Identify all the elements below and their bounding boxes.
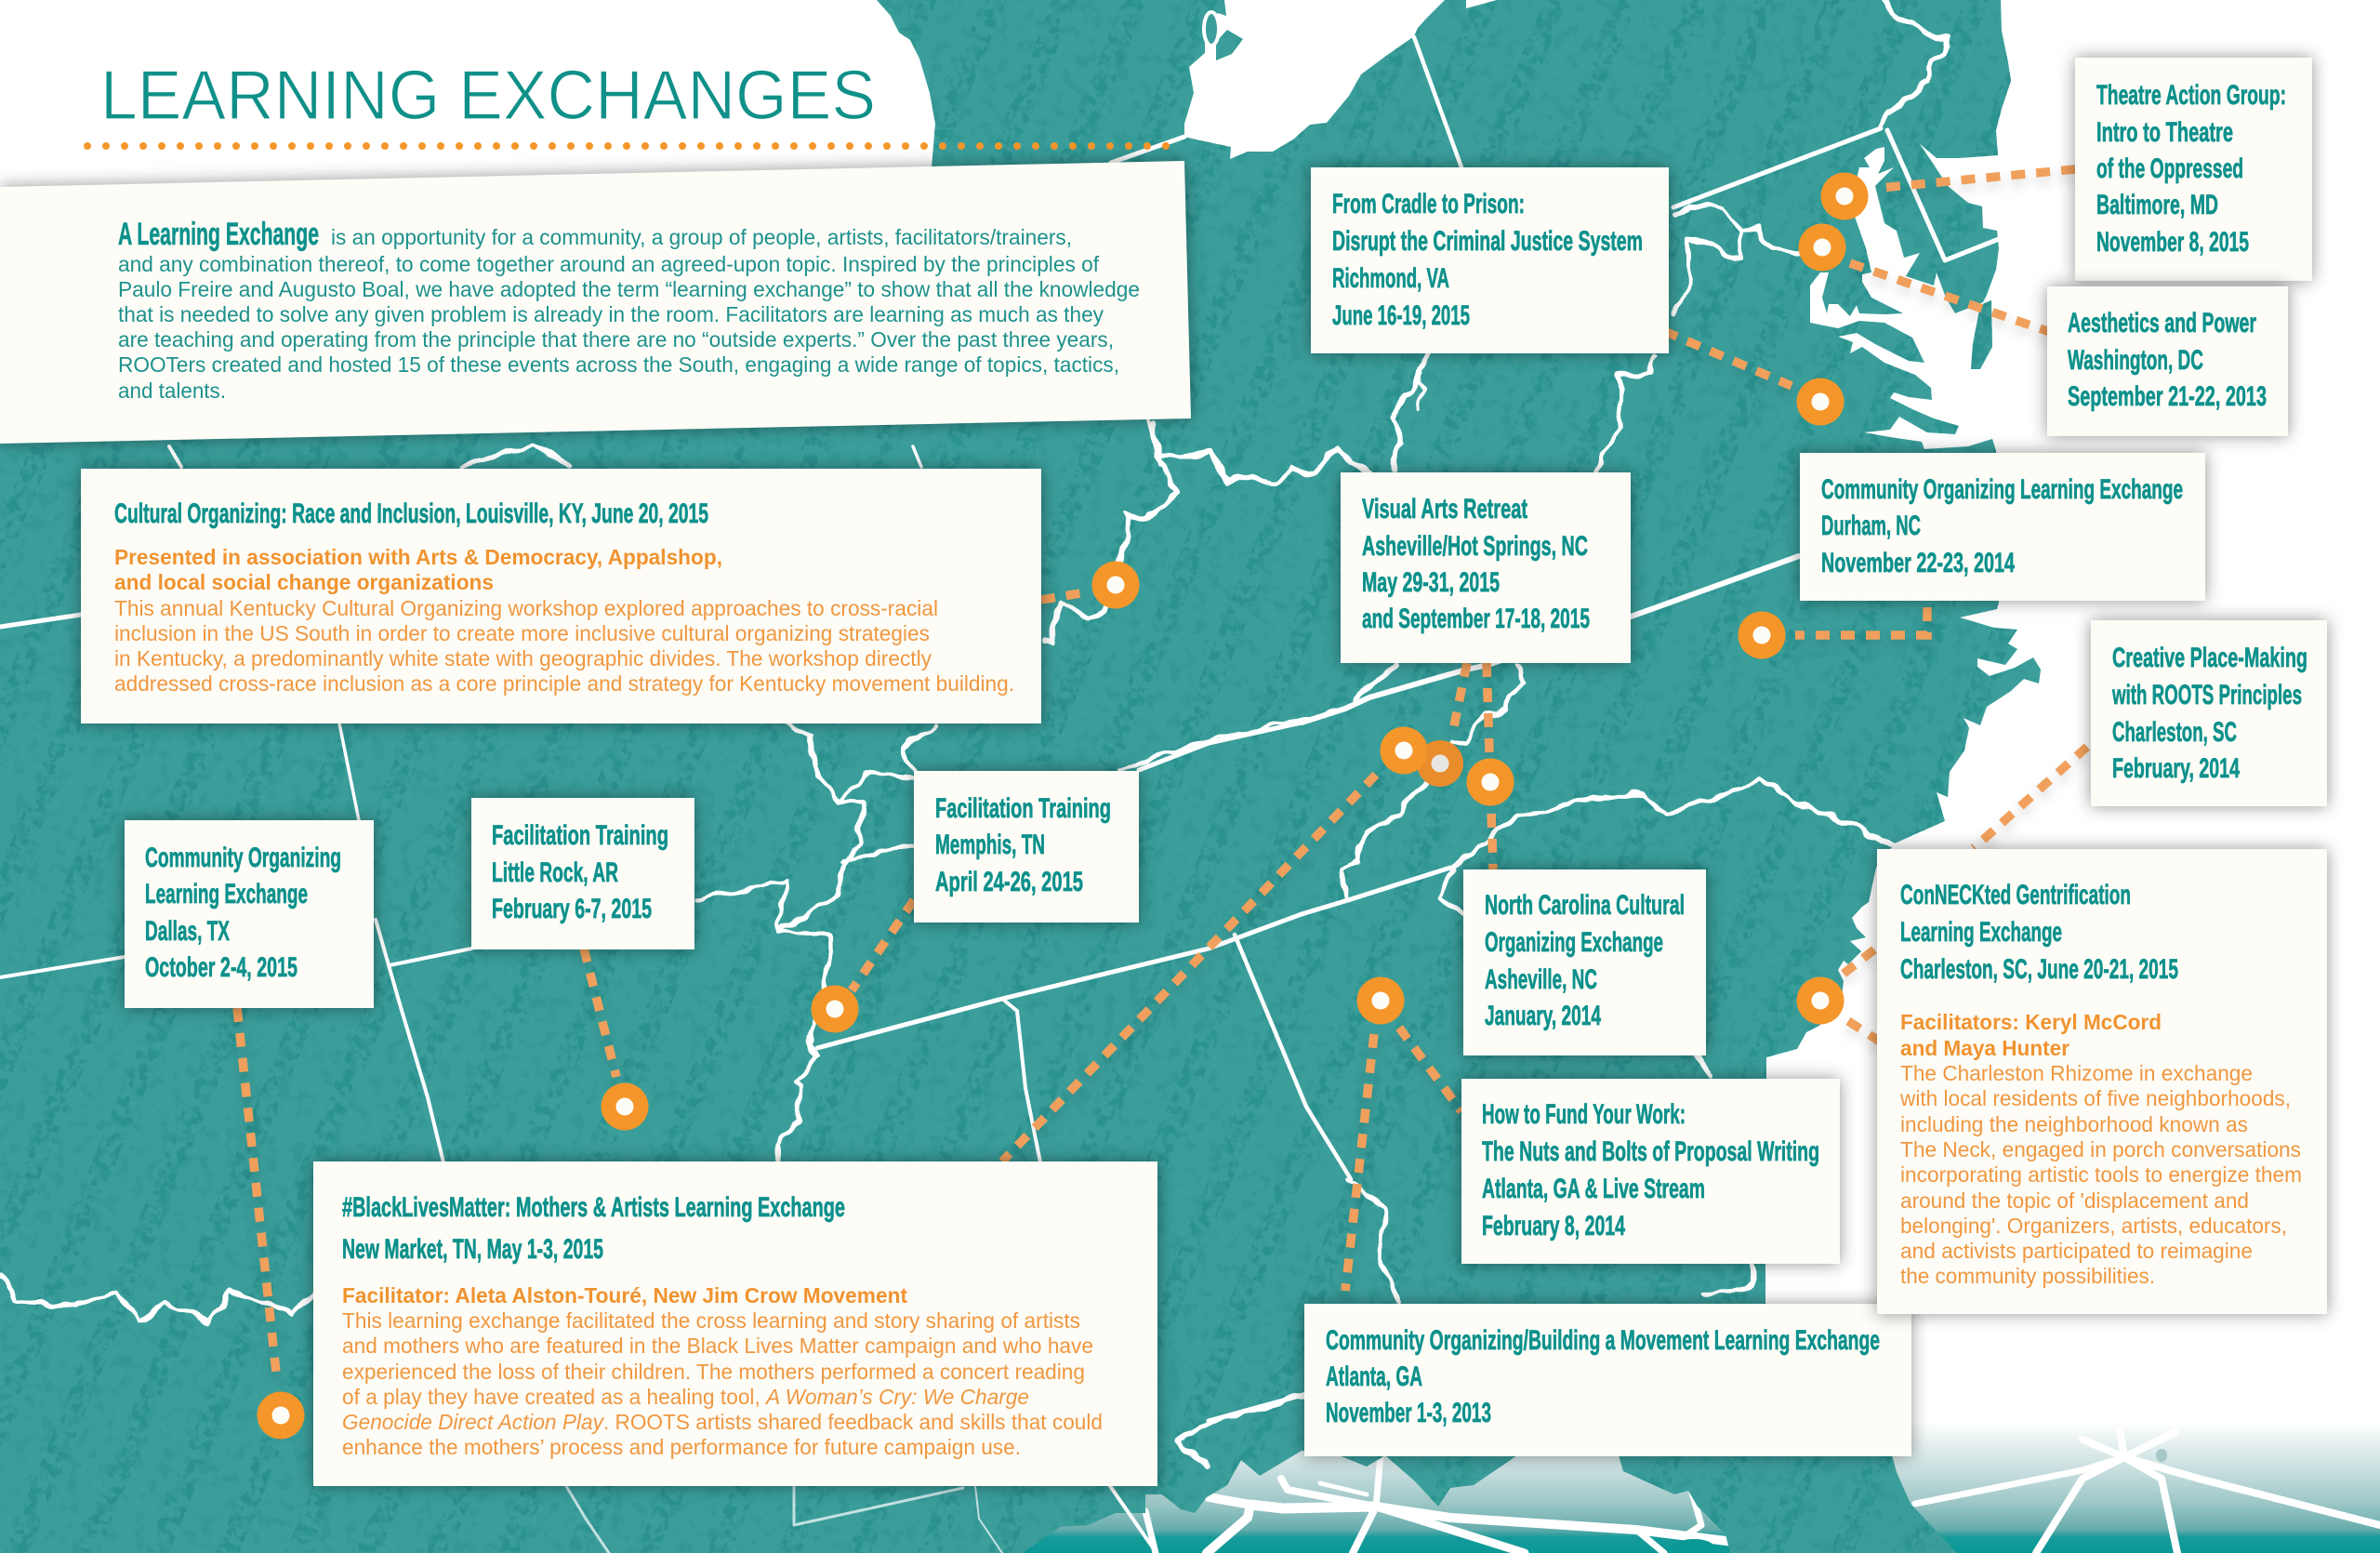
panel: Creative Place-Making: Charleston, SC: [2112, 717, 2237, 748]
panel: Richmond: From Cradle to Prison:: [1332, 189, 1525, 219]
Louisville description: This annual Kentucky Cultural Organizing workshop explored approaches to cross-racial: [114, 596, 938, 620]
panel: Atlanta Community Organizing: November 1-3, 2013: [1326, 1398, 1491, 1428]
BLM heading: [342, 1192, 845, 1265]
marker: Atlanta: [1357, 976, 1404, 1025]
panel: Dallas: [125, 820, 374, 1008]
panel: Asheville NC Cultural: Asheville, NC: [1485, 964, 1597, 995]
Louisville partners: [114, 545, 722, 594]
panel: Asheville retreat: May 29-31, 2015: [1362, 567, 1500, 598]
intro body text: ROOTers created and hosted 15 of these events across the South, engaging a wide range of topics, tactics,: [118, 352, 1119, 377]
marker: Hot Springs: [1417, 740, 1463, 787]
panel: How to Fund: The Nuts and Bolts of Proposal Writing: [1482, 1136, 1819, 1167]
panel: Asheville NC Cultural: Organizing Exchange: [1485, 927, 1663, 958]
BLM description: experienced the loss of their children. The mothers performed a concert reading: [342, 1360, 1085, 1384]
panel: Memphis: [914, 771, 1139, 923]
intro body text: Paulo Freire and Augusto Boal, we have adopted the term “learning exchange” to show that all the knowledge: [118, 277, 1140, 301]
panel: Asheville NC Cultural: North Carolina Cultural: [1485, 890, 1685, 921]
panel: Baltimore: November 8, 2015: [2096, 227, 2249, 258]
BLM heading: New Market, TN, May 1-3, 2015: [342, 1234, 603, 1265]
panel: Atlanta Community Organizing: Community Organizing/Building a Movement Learning Exchange: [1326, 1325, 1880, 1356]
Louisville heading: Cultural Organizing: Race and Inclusion, Louisville, KY, June 20, 2015: [114, 498, 708, 529]
ConNECKted description: incorporating artistic tools to energize them: [1900, 1162, 2302, 1187]
panel: Washington: Washington, DC: [2068, 345, 2203, 376]
panel: Asheville retreat: Asheville/Hot Springs, NC: [1362, 531, 1588, 562]
rivers and wavy borders: [0, 0, 1950, 1467]
panel: Durham: November 22-23, 2014: [1821, 548, 2015, 578]
ConNECKted description: belonging'. Organizers, artists, educators,: [1900, 1214, 2287, 1238]
panel: Richmond: [1311, 167, 1669, 353]
panel: Dallas: Dallas, TX: [145, 916, 230, 947]
map markers: [257, 173, 1869, 1440]
panel: Richmond: June 16-19, 2015: [1332, 300, 1470, 331]
BLM description: This learning exchange facilitated the cross learning and story sharing of artists: [342, 1308, 1080, 1333]
panel: Asheville NC Cultural: January, 2014: [1485, 1001, 1601, 1031]
panel: #BlackLivesMatter: [313, 1161, 1157, 1486]
gulf gradient with rhizome network: [976, 1423, 2380, 1553]
Louisville partners: Presented in association with Arts & Democracy, Appalshop,: [114, 545, 722, 569]
panel: intro: [0, 161, 1191, 444]
Louisville partners: and local social change organizations: [114, 570, 494, 594]
panel: ConNECKted: [1877, 849, 2327, 1314]
ConNECKted description: around the topic of 'displacement and: [1900, 1188, 2249, 1213]
marker: New Market: [1380, 727, 1428, 774]
panel: Baltimore: [2075, 58, 2312, 281]
panel: Baltimore: Intro to Theatre: [2096, 117, 2233, 148]
marker: Memphis: [811, 986, 859, 1032]
panel: Little Rock: February 6-7, 2015: [492, 894, 652, 924]
panel: Dallas: Learning Exchange: [145, 879, 308, 909]
panel: Washington: [2047, 286, 2288, 436]
panel: Creative Place-Making: [2091, 620, 2327, 806]
BLM heading: #BlackLivesMatter: Mothers & Artists Learning Exchange: [342, 1192, 845, 1223]
BLM description: enhance the mothers’ process and performance for future campaign use.: [342, 1435, 1021, 1459]
marker: Richmond: [1796, 378, 1844, 426]
marker: Durham: [1739, 612, 1785, 658]
panel: Washington: Aesthetics and Power: [2068, 308, 2256, 338]
panel: Memphis: April 24-26, 2015: [935, 867, 1083, 897]
panel: Durham: Durham, NC: [1821, 511, 1921, 541]
BLM description: and mothers who are featured in the Black Lives Matter campaign and who have: [342, 1334, 1093, 1358]
panel: Memphis: Memphis, TN: [935, 830, 1045, 860]
marker: Asheville: [1467, 759, 1514, 805]
BLM facilitator: Facilitator: Aleta Alston-Touré, New Jim Crow Movement: [342, 1283, 907, 1307]
panel: How to Fund: Atlanta, GA & Live Stream: [1482, 1174, 1705, 1204]
ConNECKted description: and activists participated to reimagine: [1900, 1239, 2253, 1263]
marker: Charleston: [1796, 976, 1844, 1025]
marker: Dallas: [257, 1391, 305, 1440]
ConNECKted heading: [1900, 880, 2178, 985]
panel: Asheville retreat: [1341, 472, 1631, 663]
panel: Little Rock: Little Rock, AR: [492, 857, 618, 888]
marker: Louisville: [1091, 562, 1140, 608]
ConNECKted description: The Neck, engaged in porch conversations: [1900, 1137, 2301, 1161]
panel: Asheville retreat: Visual Arts Retreat: [1362, 494, 1527, 524]
panel: Little Rock: Facilitation Training: [492, 820, 668, 851]
title: LEARNING EXCHANGES: [100, 56, 876, 134]
ConNECKted heading: Learning Exchange: [1900, 917, 2062, 948]
panel: Baltimore: of the Oppressed: [2096, 153, 2243, 184]
ConNECKted heading: ConNECKted Gentrification: [1900, 880, 2131, 910]
panel: Dallas: October 2-4, 2015: [145, 952, 298, 983]
intro body text: is an opportunity for a community, a group of people, artists, facilitators/trainers,: [331, 225, 1072, 249]
marker: Washington: [1798, 223, 1846, 272]
ConNECKted facilitators: Facilitators: Keryl McCord: [1900, 1010, 2162, 1034]
ConNECKted description: The Charleston Rhizome in exchange: [1900, 1061, 2253, 1085]
BLM description: Genocide Direct Action Play. ROOTS artists shared feedback and skills that could: [342, 1410, 1103, 1434]
intro body text: are teaching and operating from the principle that there are no “outside experts.” Over the past three years,: [118, 327, 1114, 352]
Louisville description: addressed cross-race inclusion as a core principle and strategy for Kentucky movement building.: [114, 671, 1014, 696]
panel: Atlanta Community Organizing: [1304, 1304, 1911, 1456]
intro body text: [118, 225, 1140, 403]
ConNECKted facilitators: and Maya Hunter: [1900, 1036, 2069, 1060]
marker: Baltimore: [1820, 173, 1869, 219]
panel: How to Fund: February 8, 2014: [1482, 1211, 1625, 1241]
Louisville description: in Kentucky, a predominantly white state with geographic divides. The workshop directly: [114, 646, 932, 670]
panel: Richmond: Disrupt the Criminal Justice System: [1332, 226, 1643, 257]
panel: Louisville: [81, 469, 1041, 723]
intro body text: that is needed to solve any given problem is already in the room. Facilitators are learning as much as they: [118, 302, 1104, 326]
panel: Washington: September 21-22, 2013: [2068, 381, 2267, 412]
panel: Durham: [1800, 453, 2205, 601]
Louisville description: inclusion in the US South in order to create more inclusive cultural organizing strategies: [114, 621, 930, 645]
marker: Little Rock: [601, 1082, 649, 1131]
intro body text: and talents.: [118, 378, 226, 403]
BLM description: of a play they have created as a healing tool, A Woman’s Cry: We Charge: [342, 1385, 1029, 1409]
ConNECKted description: the community possibilities.: [1900, 1264, 2155, 1288]
intro lead-in: A Learning Exchange: [118, 217, 319, 252]
panel: How to Fund: [1461, 1079, 1840, 1264]
dotted title rule: [87, 142, 1179, 150]
panel: Richmond: Richmond, VA: [1332, 263, 1449, 294]
intro body text: and any combination thereof, to come together around an agreed-upon topic. Inspired by the principles of: [118, 252, 1099, 276]
dashed connector lines: [237, 169, 2087, 1381]
ConNECKted description: with local residents of five neighborhoods,: [1899, 1086, 2291, 1110]
panel: Dallas: Community Organizing: [145, 843, 341, 873]
panel: Asheville NC Cultural: [1463, 869, 1706, 1055]
ConNECKted facilitators: [1900, 1010, 2162, 1060]
ConNECKted description: including the neighborhood known as: [1900, 1112, 2248, 1136]
panel: How to Fund: How to Fund Your Work:: [1482, 1099, 1686, 1130]
panel: Asheville retreat: and September 17-18, 2015: [1362, 604, 1590, 634]
BLM description: [342, 1308, 1103, 1459]
panel: Durham: Community Organizing Learning Exchange: [1821, 474, 2183, 505]
ConNECKted heading: Charleston, SC, June 20-21, 2015: [1900, 954, 2178, 985]
panel: Creative Place-Making: February, 2014: [2112, 753, 2240, 784]
panel: Baltimore: Baltimore, MD: [2096, 190, 2218, 220]
ConNECKted description: [1899, 1061, 2302, 1288]
panel: Little Rock: [471, 798, 694, 949]
panel: Atlanta Community Organizing: Atlanta, GA: [1326, 1361, 1422, 1392]
panel: Memphis: Facilitation Training: [935, 793, 1111, 824]
Louisville description: [114, 596, 1014, 696]
